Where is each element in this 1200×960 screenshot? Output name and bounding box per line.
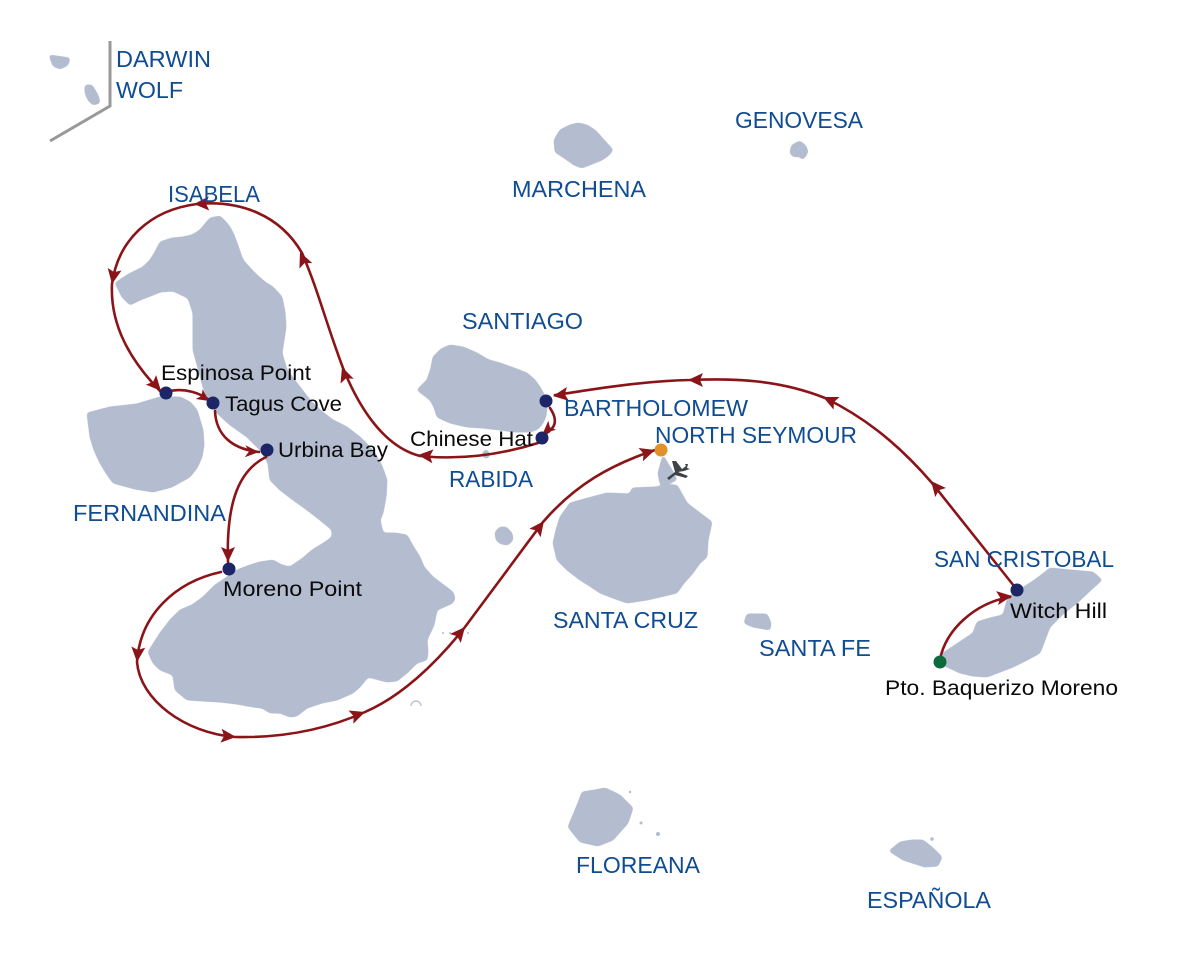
island name labels: ISABELA [168,181,261,207]
inset divider: Darwin and Wolf [50,41,110,141]
island: Espanola [889,840,942,867]
island: Rabida [482,449,490,458]
island: Genovesa [790,141,808,160]
stop name labels: Chinese Hat [410,427,533,451]
island: Fernandina [87,397,204,492]
island: small islet west of Santa Cruz [495,527,513,545]
stop name labels: Pto. Baquerizo Moreno [885,676,1118,700]
stop name labels: Witch Hill [1010,599,1107,623]
island: Marchena [554,123,613,168]
island name labels: SANTA CRUZ [553,607,698,633]
island: Darwin [49,55,70,69]
island name labels: SANTIAGO [462,308,583,334]
island: Floreana [568,788,633,846]
stop name labels: Espinosa Point [161,361,311,385]
route line [112,203,1014,737]
island: Isabela [115,216,455,717]
island: Baltra [658,455,677,484]
island name labels: BARTHOLOMEW [564,395,748,421]
island: San Cristobal [943,568,1102,677]
route arrowheads [105,196,1013,744]
stop name labels: Moreno Point [223,577,362,601]
islands layer [49,55,1102,867]
island name labels: RABIDA [449,466,534,492]
stop name labels [161,361,1118,700]
island: Santa Fe [744,614,771,630]
island name labels: FLOREANA [576,852,701,878]
route stops [160,386,1024,668]
island name labels: ESPAÑOLA [867,887,992,913]
island: Wolf [85,85,100,105]
island name labels: FERNANDINA [73,500,227,526]
island name labels: MARCHENA [512,176,647,202]
island name labels: SAN CRISTOBAL [934,546,1114,572]
island name labels: GENOVESA [735,107,864,133]
island: Santa Cruz [553,485,712,603]
island name labels: NORTH SEYMOUR [655,422,857,448]
island name labels [73,46,1114,913]
island name labels: DARWIN [116,46,211,72]
icon: airplane [667,461,690,480]
islets: small specks and rocks [411,632,934,841]
island: Santiago [417,345,547,432]
island name labels: WOLF [116,77,183,103]
stop name labels: Tagus Cove [225,392,342,416]
stop name labels: Urbina Bay [278,438,388,462]
island name labels: SANTA FE [759,635,871,661]
